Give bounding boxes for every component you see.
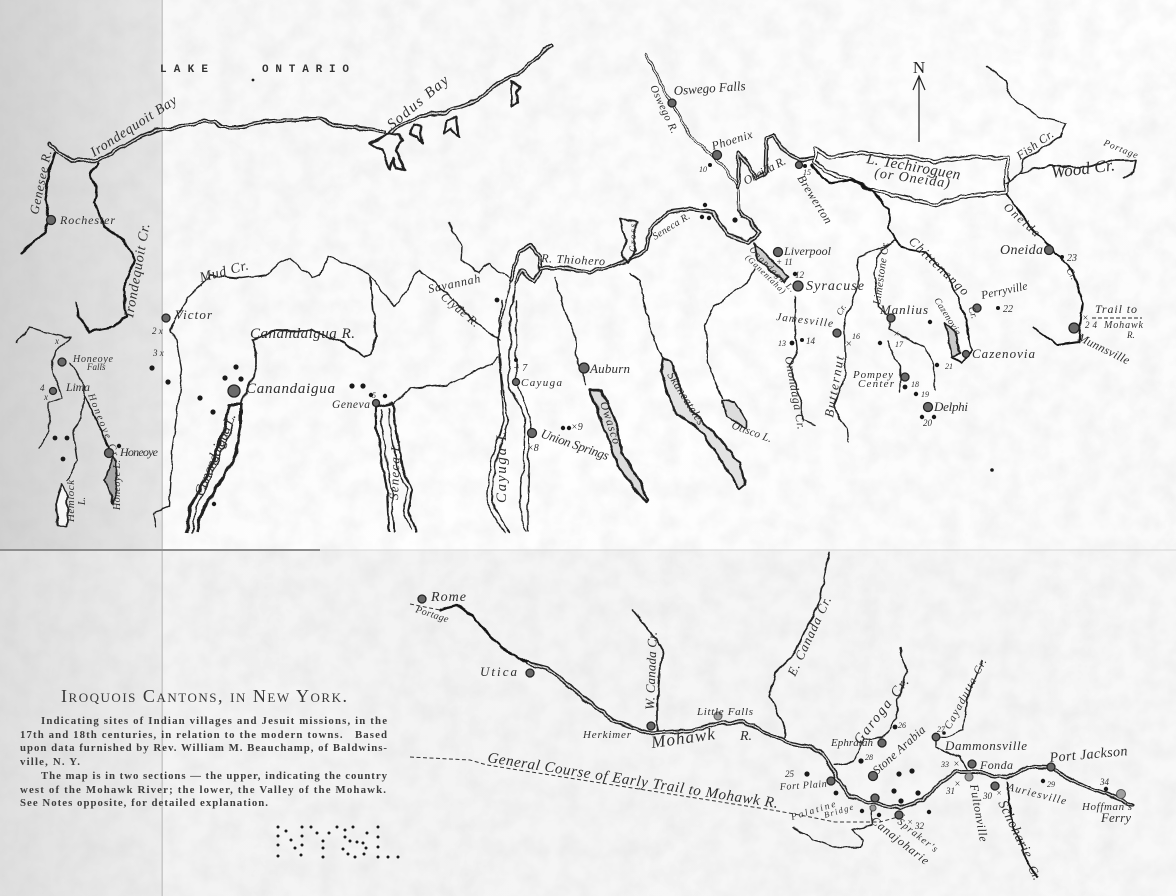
place and water labels: upper east [597, 78, 1139, 446]
place and water labels: upper west: R. Thiohero [540, 251, 605, 268]
place and water labels: upper east: 21 [945, 362, 953, 371]
place and water labels: Mohawk Valley: 32 [914, 821, 924, 831]
place and water labels: upper west: Sodus Bay [384, 72, 452, 133]
place and water labels: upper west: Honeoye Cr. [85, 391, 122, 461]
place and water labels: Mohawk Valley: 29 [1047, 780, 1055, 789]
place and water labels: upper west: Hemlock [65, 479, 77, 523]
Otisco Lake and inlet [705, 270, 754, 428]
place and water labels: upper east: Delphi [933, 399, 968, 414]
place and water labels: upper west: Canandaigua [246, 381, 335, 397]
place and water labels: upper east: Cr. [1063, 266, 1079, 282]
Butternut Creek [834, 242, 893, 442]
place and water labels: upper west [26, 72, 630, 523]
callout: trail to Mohawk R.: Mohawk [1103, 320, 1144, 331]
place and water labels: upper east: 17 [895, 340, 904, 349]
place and water labels: upper east: Liverpool [783, 244, 832, 258]
Cross Lake [620, 220, 637, 263]
place and water labels: Mohawk Valley: E. Canada Cr. [784, 594, 834, 679]
place and water labels: upper west: Rochester [59, 213, 115, 227]
place and water labels: Mohawk Valley: Ephratah [830, 737, 874, 749]
place and water labels: upper east: Limestone Cr [871, 242, 892, 306]
Genesee River [21, 153, 55, 253]
place and water labels: upper east: Brewerton [794, 172, 835, 226]
text block: map description: west of the Mohawk River; the lower, the Valley of the Mohawk. [20, 784, 386, 796]
place and water labels: Mohawk Valley: Utica [480, 664, 518, 679]
place and water labels: Mohawk Valley: Portage [413, 604, 450, 626]
place and water labels: Mohawk Valley: 34 [1099, 777, 1110, 787]
place and water labels: upper east: Cr. [965, 305, 980, 320]
callout: trail to Mohawk R.: R. [1126, 330, 1135, 340]
place and water labels: upper east: Oswego R. [647, 83, 680, 135]
place and water labels: upper east: Butternut [821, 354, 847, 419]
place and water labels: upper west: Honeoye L. [112, 460, 123, 511]
place and water labels: Mohawk Valley: Stone Arabia [870, 723, 928, 777]
map section: lower, Valley of the Mohawk [410, 553, 1133, 882]
place and water labels: Mohawk Valley: Herkimer [582, 729, 632, 741]
place and water labels: upper east: Center [858, 378, 895, 390]
place and water labels: upper west: 5 [372, 391, 376, 400]
place and water labels: Mohawk Valley: × [996, 788, 1002, 798]
town markers: upper section [46, 99, 1079, 458]
Cayadutta Creek [935, 660, 983, 770]
place and water labels: upper west: Mud Cr. [197, 258, 250, 286]
place and water labels: upper west: 2 x [152, 326, 163, 336]
place and water labels: Mohawk Valley: Palatine [789, 800, 837, 823]
text block: map description: ville, N. Y. [20, 756, 80, 768]
Oneida Creek [1007, 195, 1083, 345]
place and water labels: upper east: 10 [699, 165, 707, 174]
Honeoye rivers [17, 328, 109, 480]
place and water labels: upper east: × [893, 329, 900, 340]
place and water labels: upper west: Savannah [427, 271, 481, 296]
callout: trail to Mohawk R. [1082, 302, 1144, 340]
place and water labels: Mohawk Valley: General Course of Early Trail to Mohawk R. [486, 750, 779, 812]
place and water labels: upper west: Falls [86, 362, 106, 372]
place and water labels: Mohawk Valley: 31 [945, 786, 955, 796]
place and water labels: upper east: Onondaga Cr. [782, 355, 809, 430]
place and water labels: Mohawk Valley: Hoffman's [1081, 801, 1132, 813]
place and water labels: upper east: 22 [1003, 304, 1013, 315]
place and water labels: upper east: 14 [806, 336, 816, 346]
place and water labels: upper east: Skaneateles [664, 369, 708, 428]
Onondaga Creek [789, 297, 815, 425]
place and water labels: upper east: × [845, 338, 852, 350]
place and water labels: upper west: 3 x [152, 348, 164, 358]
West Canada Creek [633, 610, 663, 730]
place and water labels: Mohawk Valley: Rome [430, 590, 466, 605]
text: Lake Ontario: ONTARIO [262, 64, 349, 76]
Onondaga Lake [754, 242, 788, 282]
place and water labels: upper east: 15 [803, 168, 811, 177]
text block: map description: upon data furnished by Rev. William M. Beauchamp, of Baldwins- [20, 742, 387, 754]
place and water labels: upper east: Seneca R. [651, 211, 692, 243]
place and water labels: upper east: Otisco L. [730, 420, 774, 445]
place and water labels: upper east: Owasco [597, 400, 624, 446]
callout: trail to Mohawk R.: 24 [1085, 320, 1098, 330]
Clyde River [419, 270, 500, 340]
place and water labels: Mohawk Valley: Cayadutta Cr. [942, 657, 989, 731]
place and water labels: upper east: Chittenango [906, 233, 973, 299]
place and water labels: upper west: 4 [40, 383, 45, 393]
place and water labels: Mohawk Valley: 33 [940, 760, 949, 769]
place and water labels: upper east: Cazenovia [931, 296, 962, 337]
Cazenovia Lake [945, 323, 960, 357]
Hemlock Lake [56, 483, 68, 527]
place and water labels: Mohawk Valley: R. [739, 729, 752, 744]
Seneca Lake inner shore [381, 408, 411, 532]
town markers: lower section [418, 595, 1055, 819]
place and water labels: Mohawk Valley: Garoga Cr. [851, 675, 912, 747]
place and water labels: upper west: ×8 [527, 443, 539, 454]
place and water labels: Mohawk Valley: 28 [865, 753, 873, 762]
Mohawk River [528, 663, 1133, 808]
text: Lake Ontario [160, 64, 349, 76]
text block: map description [20, 715, 388, 809]
place and water labels: upper west: x [54, 336, 59, 346]
place and water labels: upper west: Auburn [589, 361, 630, 376]
place and water labels: upper west: Canandaigua L. [192, 411, 240, 498]
place and water labels: upper west: Honeoye [72, 354, 114, 365]
place and water labels: Mohawk Valley: Cr. [1025, 863, 1044, 882]
place and water labels: upper west: Geneva [332, 399, 370, 411]
place and water labels: Mohawk Valley: × [907, 817, 913, 827]
place and water labels: upper east: 23 [1067, 253, 1077, 264]
callout: trail to Mohawk R.: Trail to [1095, 302, 1137, 316]
place and water labels: upper east: 18 [911, 380, 919, 389]
Irondequoit Creek [77, 163, 135, 332]
place and water labels: upper east: 16 [852, 332, 860, 341]
text: Lake Ontario: LAKE [160, 64, 208, 76]
place and water labels: upper east: Syracuse [806, 279, 864, 294]
place and water labels: upper east: Cross [628, 224, 638, 252]
place and water labels: upper east: + 11 [776, 257, 793, 267]
place and water labels: Mohawk Valley: Fonda [979, 758, 1013, 772]
place and water labels: Mohawk Valley: Auriesville [1005, 781, 1068, 807]
place and water labels: Mohawk Valley: Dammonsville [944, 738, 1027, 753]
place and water labels: Mohawk Valley: 27 [937, 725, 946, 734]
text block: map description: The map is in two sections — the upper, indicating the country [41, 770, 388, 782]
Chittenango Creek [870, 190, 972, 363]
Savannah stream [449, 223, 508, 278]
place and water labels: Mohawk Valley: Port Jackson [1048, 744, 1128, 766]
place and water labels: upper west: Irondequoit Cr. [122, 223, 153, 320]
text block: map description: See Notes opposite, for detailed explanation. [20, 797, 268, 809]
place and water labels: Mohawk Valley: Little Falls [696, 706, 753, 718]
place and water labels: Mohawk Valley [413, 590, 1132, 882]
place and water labels: upper east: Oneida [1001, 200, 1043, 240]
place and water labels: Mohawk Valley: 26 [898, 721, 906, 730]
place and water labels: Mohawk Valley: Spraker's [895, 817, 940, 855]
place and water labels: Mohawk Valley: Schoharie [994, 798, 1035, 860]
Schoharie Creek [1007, 783, 1037, 877]
Oswego River [646, 55, 739, 210]
Fish Creek [986, 67, 1066, 183]
place and water labels: upper east: (or Oneida) [873, 166, 951, 192]
place and water labels: upper east: Onondaga L. [748, 244, 797, 294]
place and water labels: Mohawk Valley: 30 [982, 791, 992, 801]
place and water labels: Mohawk Valley: Fultonville [967, 782, 991, 843]
place and water labels: Mohawk Valley: Ferry [1100, 810, 1131, 825]
lower stream near Canajoharie [793, 807, 872, 847]
place and water labels: upper east: Portage [1101, 138, 1139, 161]
place and water labels: upper west: Cayuga [521, 377, 562, 389]
place and water labels: upper east: Wood Cr. [1050, 155, 1116, 182]
Seneca Lake [376, 403, 417, 532]
place and water labels: upper east: (Ganentaha) [744, 252, 788, 296]
Owasco Lake and outlet [555, 278, 648, 502]
place and water labels: upper east: L. Techiroguen [864, 151, 962, 183]
place and water labels: upper west: Union Springs [539, 426, 611, 463]
place and water labels: upper west: L. [77, 497, 88, 506]
place and water labels: upper east: Manlius [879, 302, 928, 317]
place and water labels: upper west: Lima [65, 380, 90, 394]
north arrow [913, 58, 925, 142]
place and water labels: Mohawk Valley: Canajoharie [868, 813, 932, 868]
village site dots: upper section [53, 79, 1064, 506]
Oneida Lake [812, 148, 1007, 205]
Canandaigua Lake [187, 405, 241, 533]
place and water labels: upper west: Irondequoit Bay [87, 93, 181, 161]
place and water labels: upper west: Cayuga L. [494, 427, 510, 503]
place and water labels: Mohawk Valley: Bridge [823, 802, 854, 820]
place and water labels: upper east: Phoenix [709, 127, 755, 153]
Geneva outlet stream [393, 358, 498, 405]
Mohawk River upper reach [440, 605, 528, 663]
Cayuga Lake [487, 245, 541, 532]
place and water labels: upper east: Oswego Falls [673, 78, 746, 98]
Wood Creek [1020, 160, 1136, 178]
Mud Creek and Victor stream [154, 256, 419, 527]
place and water labels: upper east: Oneida [1000, 243, 1043, 258]
Sodus Bay inlets [370, 82, 521, 171]
text block: map description: 17th and 18th centuries, in relation to the modern towns. Based [20, 729, 387, 741]
text block: map description: Indicating sites of Indian villages and Jesuit missions, in the [41, 715, 387, 727]
place and water labels: Mohawk Valley: × [954, 779, 961, 790]
callout: trail to Mohawk R.: × [1082, 313, 1089, 324]
place and water labels: upper east: Cr. [834, 303, 848, 317]
place and water labels: upper east: Munnsville [1075, 330, 1133, 368]
dashed line: general course of early trail [410, 604, 905, 822]
place and water labels: upper east: Oneida R. [741, 154, 788, 188]
title: Iroquois Cantons, in New York. [61, 686, 347, 706]
Skaneateles Lake and outlet [631, 273, 745, 490]
place and water labels: upper west: x [43, 392, 48, 402]
village site dots: lower section [804, 725, 1108, 817]
place and water labels: Mohawk Valley: W. Canada Cr. [642, 632, 660, 710]
place and water labels: Mohawk Valley: 25 [785, 769, 794, 779]
East Canada Creek [770, 553, 829, 738]
place and water labels: upper east: Perryville [979, 280, 1029, 302]
place and water labels: upper west: Canandaigua R. [250, 326, 355, 342]
place and water labels: upper east: Jamesville [776, 311, 834, 330]
place and water labels: upper east: 13 [778, 339, 786, 348]
Oneida River [738, 135, 814, 187]
place and water labels: upper west: + 7 [513, 363, 528, 374]
Garoga Creek [835, 648, 907, 765]
place and water labels: upper east: 12 [795, 270, 804, 280]
Seneca River / Thiohero [541, 209, 760, 272]
map section: upper, country west of the Mohawk River [17, 45, 1144, 533]
Honeoye Lake [105, 457, 117, 503]
Limestone Creek [874, 240, 934, 392]
place and water labels: upper east: 19 [921, 390, 929, 399]
place and water labels: upper west: Clyde R. [438, 290, 482, 330]
grey town markers: lower section [714, 712, 1126, 811]
place and water labels: upper west: ×9 [571, 422, 583, 433]
place and water labels: upper east: Pompey [852, 369, 893, 381]
place and water labels: upper east: Cazenovia [972, 346, 1036, 361]
river line: Lake Ontario south shore [49, 45, 551, 161]
place and water labels: upper west: Victor [175, 307, 213, 322]
place and water labels: upper east: Fish Cr. [1013, 127, 1056, 163]
place and water labels: Mohawk Valley: Mohawk [649, 724, 716, 752]
north arrow: N [913, 58, 925, 77]
library perforation stamp: NYSL [276, 826, 400, 858]
place and water labels: upper west: Seneca L. [386, 440, 403, 500]
place and water labels: upper west: Genesee R. [26, 149, 54, 216]
place and water labels: Mohawk Valley: × [953, 759, 960, 770]
Canandaigua River [240, 278, 376, 405]
place and water labels: upper west: Honeoye [119, 445, 159, 459]
place and water labels: Mohawk Valley: Fort Plain [778, 779, 827, 793]
place and water labels: upper east: 20 [923, 418, 932, 428]
